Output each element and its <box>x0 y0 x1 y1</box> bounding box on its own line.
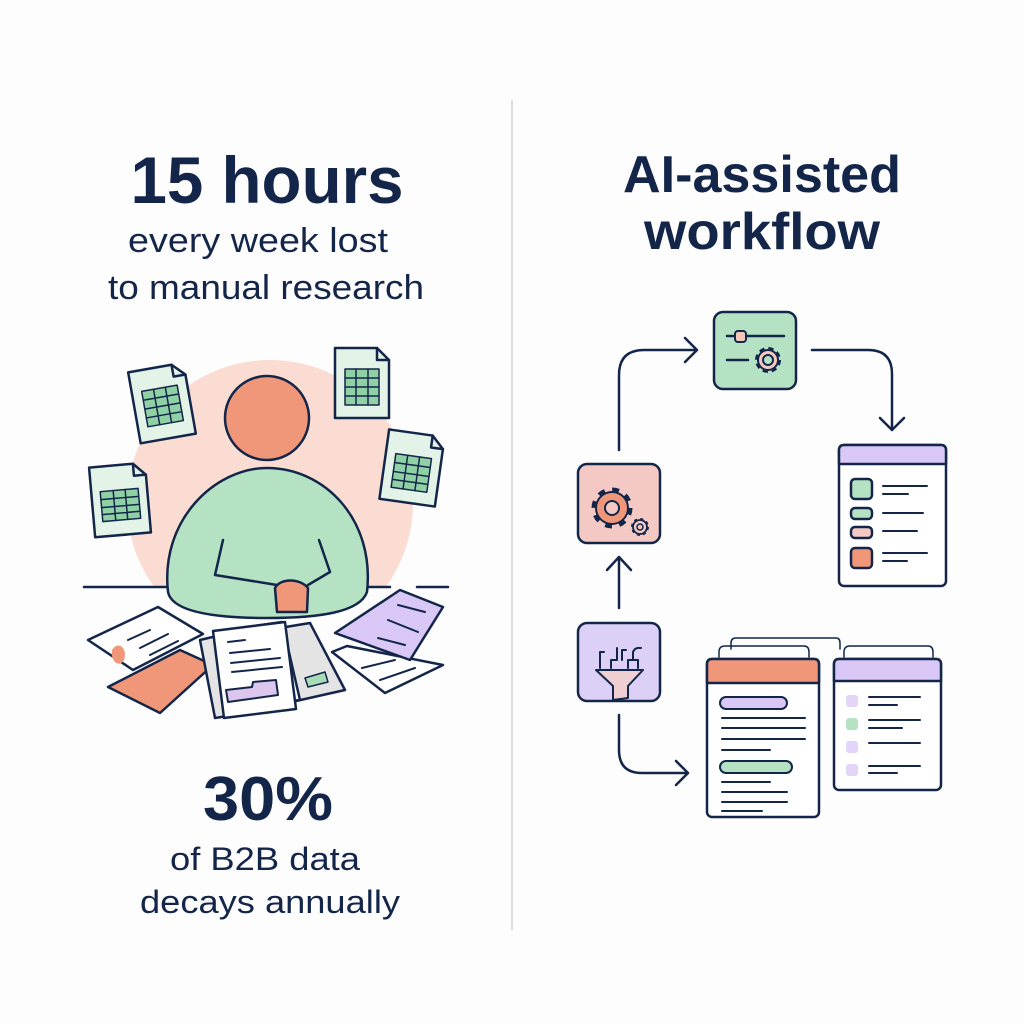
subtext: of B2B data decays annually: of B2B data <box>170 841 360 877</box>
background circle <box>130 360 413 586</box>
right heading: AI-assisted workflow: AI-assisted <box>623 146 901 204</box>
illustration: overwhelmed researcher <box>84 348 448 718</box>
arrow: green to list <box>812 350 904 430</box>
left heading: 15 hours <box>108 143 424 307</box>
right heading: AI-assisted workflow <box>623 146 901 261</box>
panel: results list <box>839 445 946 586</box>
subtext: every week lost to manual research: every week lost <box>128 222 389 260</box>
left stat: 30% <box>140 765 400 920</box>
arrow: funnel up to gears <box>607 557 631 608</box>
table line <box>84 586 448 588</box>
subtext: every week lost to manual research: to manual research <box>108 269 424 307</box>
arms <box>215 540 330 585</box>
scattered papers <box>108 650 213 713</box>
hand <box>275 580 308 612</box>
workflow diagram <box>578 312 946 817</box>
right heading: AI-assisted workflow: workflow <box>643 203 881 261</box>
subtext: every week lost to manual research <box>108 222 424 307</box>
box: settings (green) <box>714 312 796 389</box>
box: gears (pink) <box>578 464 660 543</box>
left stat: 30%: 30% <box>203 765 333 834</box>
left heading: 15 hours: 15 hours <box>130 143 404 217</box>
panel: documents <box>707 638 941 817</box>
arrow: pink to green <box>619 338 697 450</box>
infographic canvas <box>82 100 948 930</box>
head <box>225 376 309 460</box>
subtext: of B2B data decays annually <box>140 841 400 920</box>
box: funnel (purple) <box>578 623 660 701</box>
person body <box>167 468 368 618</box>
spreadsheet icons <box>128 363 196 443</box>
subtext: of B2B data decays annually: decays annually <box>140 884 400 920</box>
arrow: funnel to documents <box>619 715 688 785</box>
